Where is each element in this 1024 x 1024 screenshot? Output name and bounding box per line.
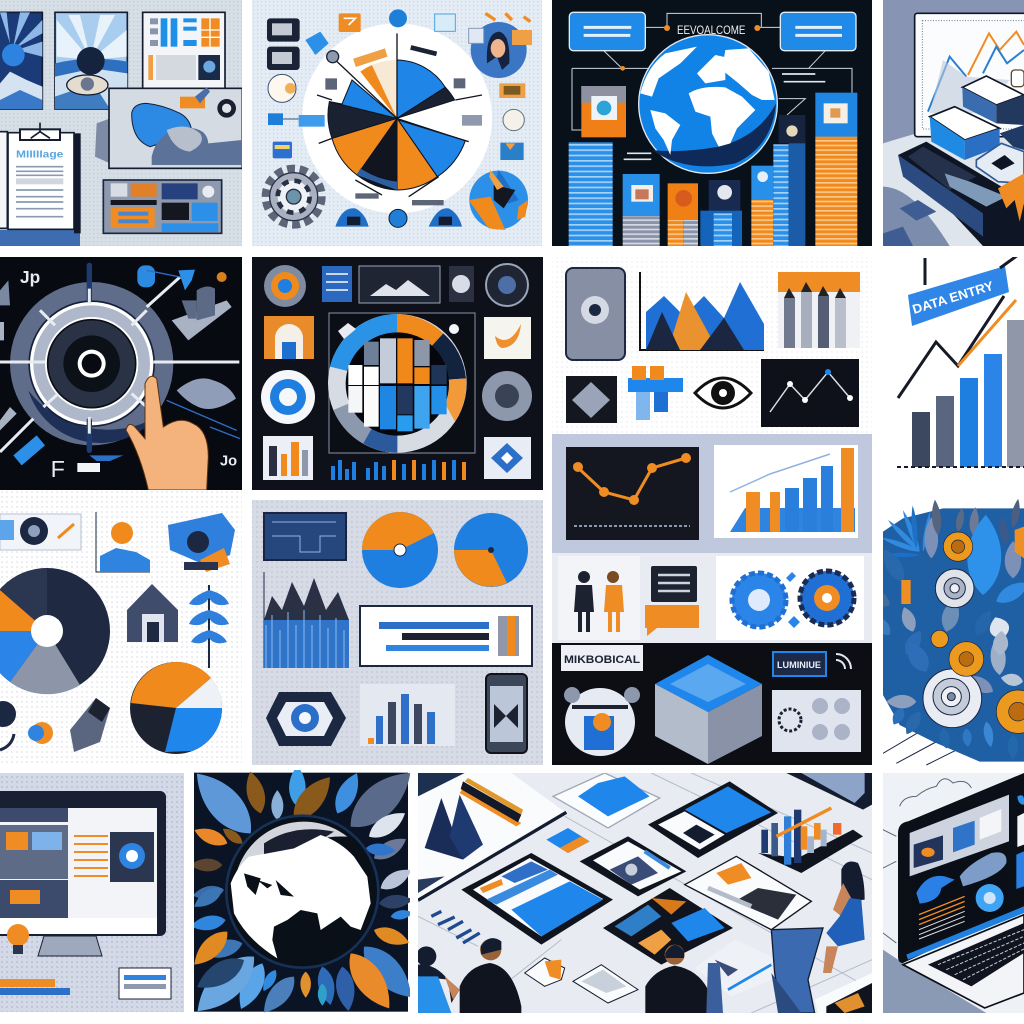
- bar tray: [758, 808, 863, 873]
- small legend marks: [624, 74, 825, 159]
- pens on sheet: [460, 778, 523, 826]
- heading: [561, 645, 643, 671]
- orange chart: [778, 272, 860, 348]
- dark line chart: [761, 359, 859, 427]
- icon: hex nut: [266, 692, 346, 746]
- icon: open book: [0, 123, 81, 246]
- scattered rocks left of monitor: [95, 118, 110, 163]
- icon: hand: [126, 376, 208, 490]
- icon: outline target: [486, 264, 528, 306]
- bottom right mark: Jo: [220, 453, 237, 469]
- icon: blue star: [178, 270, 195, 290]
- floor: [883, 950, 986, 1013]
- icon: fern: [189, 585, 229, 668]
- icon: tools blue: [628, 366, 683, 420]
- pie chart left: [362, 512, 438, 588]
- dial: [10, 282, 173, 445]
- floor corner: [815, 973, 872, 1013]
- orange dot: [217, 272, 227, 282]
- icon: lips: [177, 378, 236, 409]
- panel: rising bars: [896, 257, 1024, 468]
- white strip: [552, 553, 872, 643]
- tablet blue photo: [553, 773, 660, 828]
- icon: dial: [449, 266, 474, 302]
- tablet dark list: [648, 781, 778, 858]
- corner marks: [338, 323, 459, 339]
- capsule figure: [564, 687, 640, 756]
- icon card grid: [772, 690, 861, 752]
- mini chart: [96, 512, 150, 572]
- orange card: [581, 86, 626, 137]
- mountain icons: [425, 795, 483, 860]
- white halo: [302, 23, 492, 213]
- bottom cards: [525, 958, 638, 1003]
- photo tablet: [580, 836, 686, 896]
- connector dots: [620, 25, 856, 103]
- image: sun dome scene: [55, 12, 127, 109]
- rose: large white: [923, 669, 982, 728]
- image: blue figure with rays: [0, 12, 42, 109]
- list icon: [322, 266, 352, 302]
- cube: [655, 655, 762, 764]
- pie chart: [328, 60, 465, 190]
- panel: scattered pie charts: [0, 491, 242, 763]
- panel: laptop: [883, 773, 1024, 1013]
- pie chart right: [454, 513, 528, 587]
- globe: [226, 816, 378, 968]
- gears card: [716, 556, 864, 640]
- globe: [639, 35, 777, 173]
- icon: swirl: [482, 371, 532, 421]
- tool blue: [13, 435, 45, 465]
- monitor stand: [38, 936, 102, 956]
- bottom icons: [335, 208, 462, 227]
- chair: [771, 928, 823, 1013]
- wifi icon: [836, 654, 851, 669]
- main blue tablet: [461, 853, 613, 945]
- isometric boxes: [898, 70, 1024, 246]
- book heading: MIIIIIage: [16, 149, 64, 160]
- small corner card: [786, 773, 872, 810]
- dark photo tablet: [603, 888, 733, 965]
- mini bars tile: [263, 436, 313, 480]
- viewer left: [460, 938, 521, 1013]
- panel: pie with gears: [252, 0, 542, 246]
- panel: pies and sketches: [252, 500, 543, 765]
- panel: eye and charts: [552, 257, 872, 433]
- pie labels: [325, 45, 465, 205]
- icon: house: [127, 584, 178, 642]
- right icons: [462, 83, 525, 160]
- panel: lens dial: [0, 257, 242, 490]
- panel: world dashboard: [552, 0, 872, 246]
- lightbulb: [7, 924, 29, 954]
- right stripes: [147, 270, 240, 439]
- phone: [486, 674, 527, 753]
- callout right: [780, 12, 856, 51]
- chat icons: [645, 566, 699, 636]
- mountain card: [359, 266, 440, 303]
- magazine card: [685, 856, 811, 930]
- icon: blue orange badge: [469, 170, 528, 230]
- blue label: [773, 652, 826, 676]
- small orange blooms: [901, 527, 1024, 648]
- panel: reading desk collage: [0, 0, 242, 246]
- panel: desktop monitor: [0, 773, 184, 1012]
- small orange card: [546, 828, 590, 853]
- viewer far left: [416, 946, 460, 1013]
- icon: blue oval: [137, 265, 155, 287]
- camera card: [0, 514, 81, 550]
- icon: eye: [695, 378, 751, 408]
- panel: stacked boxes: [883, 0, 1024, 246]
- panel: isometric desk: [418, 773, 872, 1013]
- heading: EEVOALCOME: [677, 23, 745, 37]
- white tag: [77, 463, 100, 472]
- viewer center: [645, 945, 723, 1013]
- mountain sheet: [418, 773, 566, 900]
- connector lines: [572, 13, 852, 130]
- blue label: LUMINIUE: [777, 660, 821, 670]
- rose: orange middle: [949, 642, 984, 676]
- floor: [883, 133, 1024, 246]
- floor lines: [883, 732, 963, 765]
- leaves: [860, 498, 1024, 759]
- seated woman: [823, 862, 865, 973]
- sheet with photo: [695, 940, 771, 996]
- left tools: [0, 322, 17, 430]
- laptop: [898, 773, 1024, 1008]
- heading: MIKBOBICAL: [564, 654, 640, 666]
- skyline bar chart: [264, 572, 349, 668]
- center card: [329, 313, 475, 453]
- banner: [908, 266, 1009, 326]
- small dots left: [0, 701, 53, 750]
- blue mark: [89, 455, 123, 461]
- image: monitor with figure: [109, 87, 242, 168]
- top icons: [327, 9, 455, 63]
- cloud sketch: [883, 779, 971, 943]
- line chart card: [915, 13, 1024, 137]
- small card: [119, 968, 171, 999]
- stacked bar chart card: [714, 445, 858, 538]
- large donut chart: [0, 568, 110, 694]
- banner text: DATA ENTRY: [910, 278, 996, 317]
- rose: white top: [935, 569, 974, 608]
- rose: orange top: [943, 532, 973, 561]
- list pens: [431, 911, 480, 943]
- pens: [0, 979, 70, 995]
- city chart: [360, 684, 455, 746]
- small dark tile: [566, 376, 617, 423]
- letter mark: F: [51, 456, 65, 482]
- trend arrows: [898, 255, 1018, 398]
- panel: dark dashboard: [252, 257, 543, 490]
- icon: machine: [172, 287, 232, 340]
- icon: person portrait: [469, 13, 532, 78]
- icon: circle target: [261, 370, 315, 424]
- equalizer strip: [331, 460, 466, 480]
- panel: globe and leaves: [194, 770, 410, 1012]
- monitor: [0, 791, 166, 936]
- left icons: [267, 18, 329, 158]
- panel: analytics people: [552, 434, 872, 765]
- panel: roses: [883, 499, 1024, 766]
- floor tiles: [883, 200, 936, 246]
- pie chart: [130, 662, 222, 754]
- icon: bird tile: [484, 317, 531, 359]
- callout left: [569, 12, 645, 51]
- icon: rocket: [70, 698, 110, 752]
- icon: blue machine: [168, 513, 235, 572]
- bar chart: [569, 93, 857, 246]
- blueprint card: [264, 513, 346, 560]
- ring chart: [328, 314, 467, 453]
- bar chart: [912, 320, 1024, 467]
- grid tiles: [348, 365, 362, 385]
- image: dashboard card: [143, 12, 225, 88]
- icon: diamond tile: [484, 437, 531, 479]
- pens card: [360, 606, 532, 666]
- dark line chart: [566, 447, 699, 540]
- mountain chart: [640, 272, 764, 350]
- pie leader lines: [317, 33, 482, 197]
- laptop screen tiles: [914, 795, 1024, 939]
- foliage mass: [883, 508, 1024, 762]
- dark box panel: [552, 643, 872, 765]
- image: tablet UI: [103, 180, 222, 233]
- rose: orange right: [996, 690, 1024, 733]
- two people: [558, 556, 640, 640]
- phone card: [566, 268, 625, 360]
- icon: target: [264, 265, 306, 307]
- dial spokes: [81, 265, 97, 450]
- leaves: [185, 761, 421, 1022]
- orange tile: [264, 316, 314, 359]
- top-left mark: Jp: [20, 267, 40, 287]
- icon: gear: [265, 168, 322, 225]
